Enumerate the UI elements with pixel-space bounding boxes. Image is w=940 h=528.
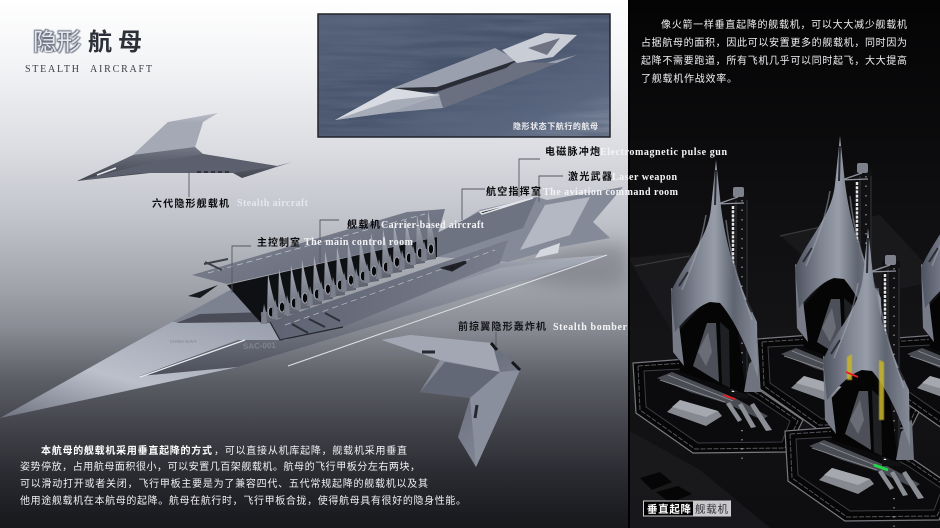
badge: vertical takeoff carrier aircraft: 垂直起降 bbox=[647, 502, 692, 516]
text block: carrier description: 可以滑动打开或者关闭，飞行甲板主要是为了兼容四代、五代常规起降的舰载机以及其 bbox=[20, 477, 428, 490]
label: aviation command room: The aviation command room bbox=[543, 187, 679, 198]
photo caption: 隐形状态下航行的航母 bbox=[513, 121, 598, 131]
hangar bbox=[227, 237, 437, 324]
label: carrier-based aircraft bbox=[347, 218, 485, 231]
text block: carrier description: 他用途舰载机在本航母的起降。航母在航行时，飞行甲板合拢，使得航母具有很好的隐身性能。 bbox=[20, 494, 466, 507]
text block: vertical takeoff description: 起降不需要跑道，所有飞机几乎可以同时起飞，大大提高 bbox=[641, 54, 907, 67]
forward base bbox=[172, 290, 270, 322]
text block: vertical takeoff description bbox=[641, 18, 907, 85]
label: stealth bomber: 前掠翼隐形轰炸机 bbox=[458, 320, 546, 333]
label: stealth aircraft bbox=[152, 197, 309, 210]
label: stealth bomber: Stealth bomber bbox=[553, 322, 628, 333]
illustration: stealth bomber bbox=[382, 335, 520, 467]
text block: vertical takeoff description: 了舰载机作战效率。 bbox=[641, 72, 737, 85]
title: 隐形 bbox=[33, 29, 81, 56]
indicator lights bbox=[723, 372, 858, 399]
lower flight deck bbox=[270, 240, 508, 340]
label: laser weapon: 激光武器 bbox=[568, 170, 612, 183]
illustration: carrier bbox=[0, 187, 623, 418]
text block: carrier description bbox=[20, 444, 466, 507]
illustration: carrier: CHINA NAVY bbox=[170, 339, 197, 344]
label: electromagnetic pulse gun: Electromagnetic pulse gun bbox=[600, 147, 727, 158]
text block: vertical takeoff description: 像火箭一样垂直起降的舰载机，可以大大减少舰载机 bbox=[661, 18, 907, 31]
label: laser weapon: Laser weapon bbox=[612, 172, 677, 183]
badge: vertical takeoff carrier aircraft bbox=[644, 501, 730, 516]
label: main control room: The main control room bbox=[304, 237, 414, 248]
label: stealth bomber bbox=[458, 320, 628, 333]
label: electromagnetic pulse gun: 电磁脉冲炮 bbox=[545, 145, 600, 158]
craft 4 bbox=[883, 136, 940, 438]
text block: vertical takeoff description: 占据航母的面积，因此可以安置更多的舰载机，同时因为 bbox=[641, 36, 907, 49]
upper flight deck bbox=[192, 209, 445, 284]
text block: carrier description: 本航母的舰载机采用垂直起降的方式 bbox=[41, 444, 212, 457]
stern section bbox=[437, 187, 623, 262]
craft 1 bbox=[633, 160, 803, 462]
craft 3 bbox=[785, 228, 940, 528]
label: carrier-based aircraft: 舰载机 bbox=[347, 218, 380, 231]
craft bays on the right bbox=[633, 136, 940, 528]
label: stealth aircraft: Stealth aircraft bbox=[237, 198, 309, 209]
label: aviation command room bbox=[486, 185, 679, 198]
text block: carrier description: 姿势停放，占用航母面积很小，可以安置几百架舰载机。航母的飞行甲板分左右两块， bbox=[20, 460, 420, 473]
label: stealth aircraft: 六代隐形舰载机 bbox=[152, 197, 229, 210]
hull marks: SAC-001 bbox=[243, 341, 277, 351]
title: 隐形 bbox=[33, 29, 81, 56]
label: electromagnetic pulse gun bbox=[545, 145, 727, 158]
text block: carrier description: ，可以直接从机库起降，舰载机采用垂直 bbox=[214, 444, 407, 457]
label: main control room: 主控制室 bbox=[257, 236, 300, 249]
label: laser weapon bbox=[568, 170, 677, 183]
title: 航母 bbox=[88, 29, 142, 56]
label: aviation command room: 航空指挥室 bbox=[486, 185, 541, 198]
panel: right background bbox=[628, 0, 940, 528]
craft 2 bbox=[757, 136, 927, 438]
illustration: stealth aircraft bbox=[77, 113, 292, 181]
label: carrier-based aircraft: Carrier-based aircraft bbox=[381, 220, 485, 231]
yellow exhaust bbox=[847, 354, 884, 420]
photo: stealth carrier at sea bbox=[318, 14, 610, 137]
leader lines bbox=[189, 159, 563, 347]
carrier-based aircraft row bbox=[261, 211, 436, 324]
label: main control room bbox=[257, 236, 414, 249]
badge: vertical takeoff carrier aircraft: 舰载机 bbox=[695, 502, 728, 516]
title bbox=[25, 29, 152, 75]
title: STEALTH bbox=[25, 64, 79, 75]
hull bbox=[0, 255, 607, 418]
panel: left background bbox=[0, 0, 628, 528]
title: AIRCRAFT bbox=[90, 64, 152, 75]
